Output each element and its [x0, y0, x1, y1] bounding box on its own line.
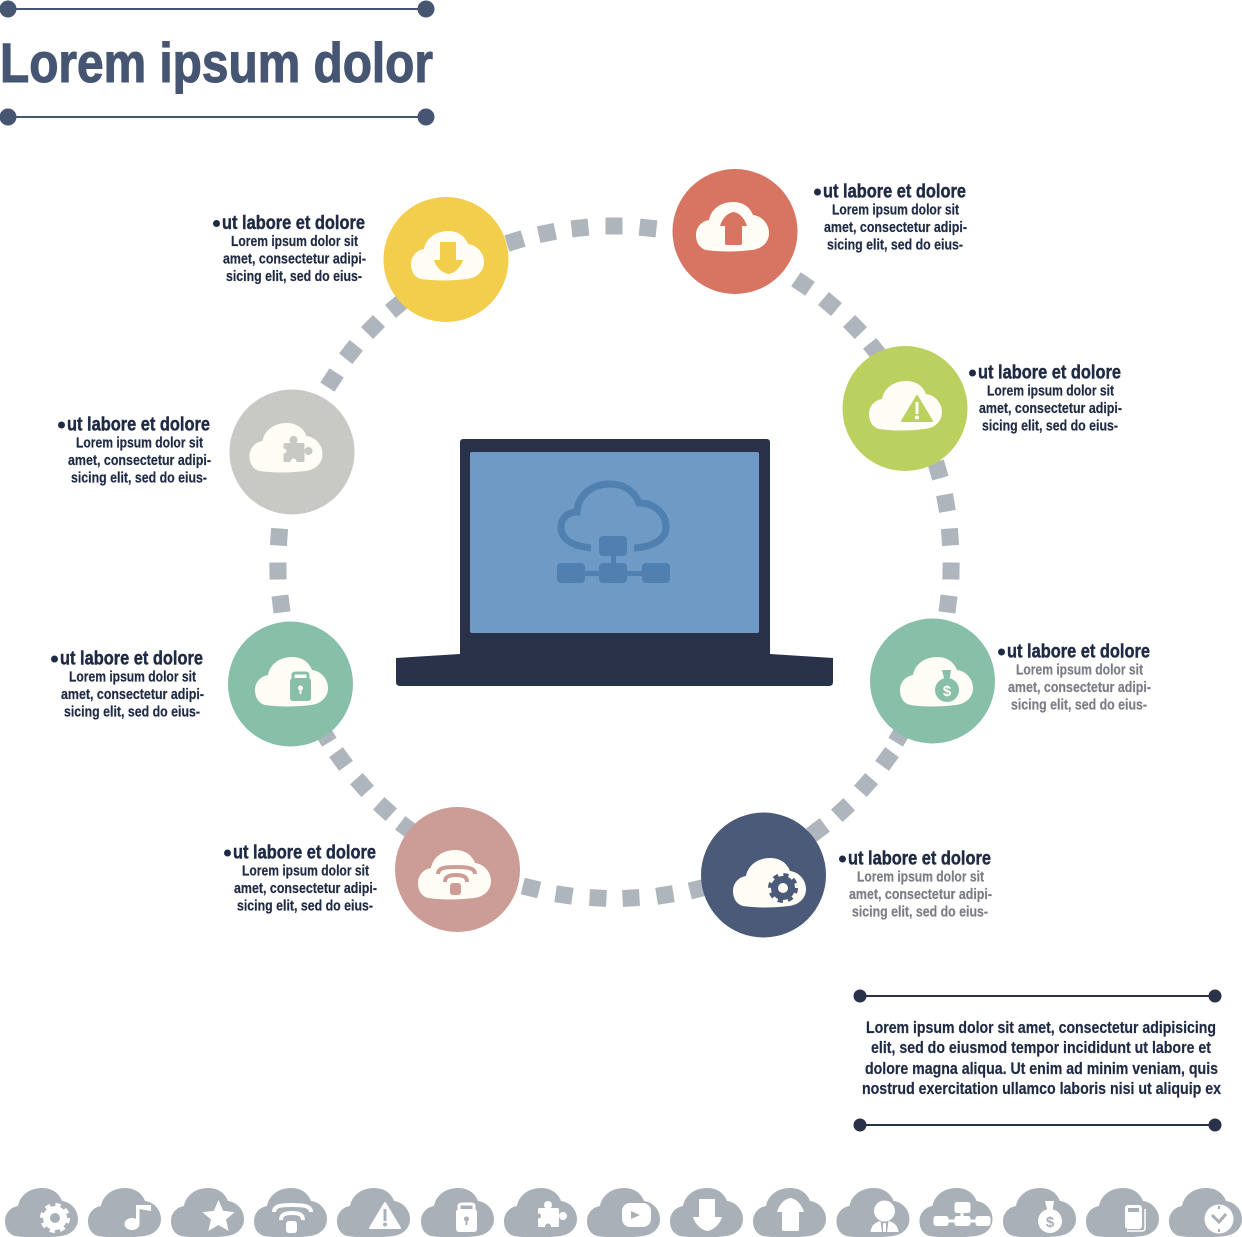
dashed ring connecting the nodes: [269, 218, 960, 907]
node: money (teal): $: [943, 683, 952, 700]
text block: lime node: [969, 362, 1122, 434]
icon: download cloud: [670, 1188, 743, 1237]
text block: yellow node: amet, consectetur adipi-: [223, 252, 366, 268]
summary text: [862, 1019, 1222, 1098]
icon: star cloud: [171, 1188, 244, 1237]
node: wifi (pink): [395, 807, 520, 932]
icon: clock cloud: [1169, 1188, 1242, 1237]
text block: navy node: [839, 848, 992, 920]
header rule: bottom: [0, 108, 434, 126]
icon: video cloud: [587, 1188, 660, 1237]
text block: lime node: sicing elit, sed do eius-: [982, 418, 1118, 434]
node: upload (red): [672, 169, 798, 294]
text block: pink node: amet, consectetur adipi-: [234, 881, 377, 897]
text block: right teal node: [998, 642, 1151, 714]
icon: upload cloud: [753, 1188, 826, 1237]
text block: lime node: amet, consectetur adipi-: [979, 401, 1122, 417]
text block: yellow node: [213, 213, 366, 285]
icon: warning cloud: [337, 1188, 410, 1237]
node: warning (lime): [842, 346, 968, 471]
text block: right teal node: amet, consectetur adipi-: [1008, 680, 1151, 696]
header rule: top: [0, 0, 434, 18]
laptop: [396, 439, 833, 686]
text block: grey node: Lorem ipsum dolor sit: [76, 436, 203, 452]
text block: navy node: Lorem ipsum dolor sit: [857, 870, 984, 886]
text block: left teal node: ut labore et dolore: [60, 648, 203, 670]
text block: yellow node: sicing elit, sed do eius-: [226, 269, 362, 285]
icon: lock cloud: [421, 1188, 494, 1237]
text block: lime node: ut labore et dolore: [978, 362, 1121, 384]
text block: red node: ut labore et dolore: [823, 182, 966, 202]
text block: left teal node: Lorem ipsum dolor sit: [69, 670, 196, 686]
text block: lime node: Lorem ipsum dolor sit: [987, 384, 1114, 400]
text block: right teal node: sicing elit, sed do eius-: [1011, 698, 1147, 714]
text block: red node: amet, consectetur adipi-: [824, 220, 967, 236]
icon: cloud network: [557, 484, 670, 583]
node: download (yellow): [384, 197, 508, 322]
title: Lorem ipsum dolor: [0, 31, 433, 94]
text block: pink node: sicing elit, sed do eius-: [237, 898, 373, 914]
text block: left teal node: sicing elit, sed do eius-: [64, 704, 200, 720]
icon: wifi cloud: [254, 1188, 327, 1237]
node: puzzle (grey): [230, 390, 354, 514]
text block: pink node: Lorem ipsum dolor sit: [242, 864, 369, 880]
text block: left teal node: amet, consectetur adipi-: [61, 687, 204, 703]
text block: yellow node: Lorem ipsum dolor sit: [231, 234, 358, 250]
text block: right teal node: ut labore et dolore: [1007, 642, 1150, 662]
text block: red node: [814, 182, 967, 254]
icon: person cloud: [836, 1188, 910, 1237]
text block: red node: sicing elit, sed do eius-: [827, 238, 963, 254]
icon: money cloud: $: [1046, 1214, 1055, 1231]
text block: grey node: amet, consectetur adipi-: [68, 453, 211, 469]
node: lock (teal): [228, 622, 353, 746]
text block: navy node: sicing elit, sed do eius-: [852, 904, 988, 920]
summary panel: [854, 990, 1222, 1132]
text block: yellow node: ut labore et dolore: [222, 213, 365, 234]
icon: money cloud: [1003, 1188, 1076, 1237]
icon: gear cloud: [5, 1188, 78, 1237]
text block: left teal node: [51, 648, 204, 720]
text block: red node: Lorem ipsum dolor sit: [832, 202, 959, 218]
icon strip: grey clouds: [5, 1188, 1242, 1237]
text block: grey node: [58, 414, 211, 486]
icon: music cloud: [88, 1188, 161, 1237]
text block: grey node: ut labore et dolore: [67, 414, 210, 436]
node: money (teal): [870, 618, 995, 744]
text block: pink node: ut labore et dolore: [233, 842, 376, 864]
icon: puzzle cloud: [504, 1188, 577, 1237]
icon: network cloud: [920, 1188, 992, 1237]
node: gear (navy): [701, 812, 826, 938]
text block: grey node: sicing elit, sed do eius-: [71, 470, 207, 486]
icon: phone cloud: [1086, 1188, 1159, 1237]
text block: pink node: [224, 842, 377, 914]
text block: navy node: ut labore et dolore: [848, 848, 991, 870]
text block: navy node: amet, consectetur adipi-: [849, 887, 992, 903]
text block: right teal node: Lorem ipsum dolor sit: [1016, 662, 1143, 678]
